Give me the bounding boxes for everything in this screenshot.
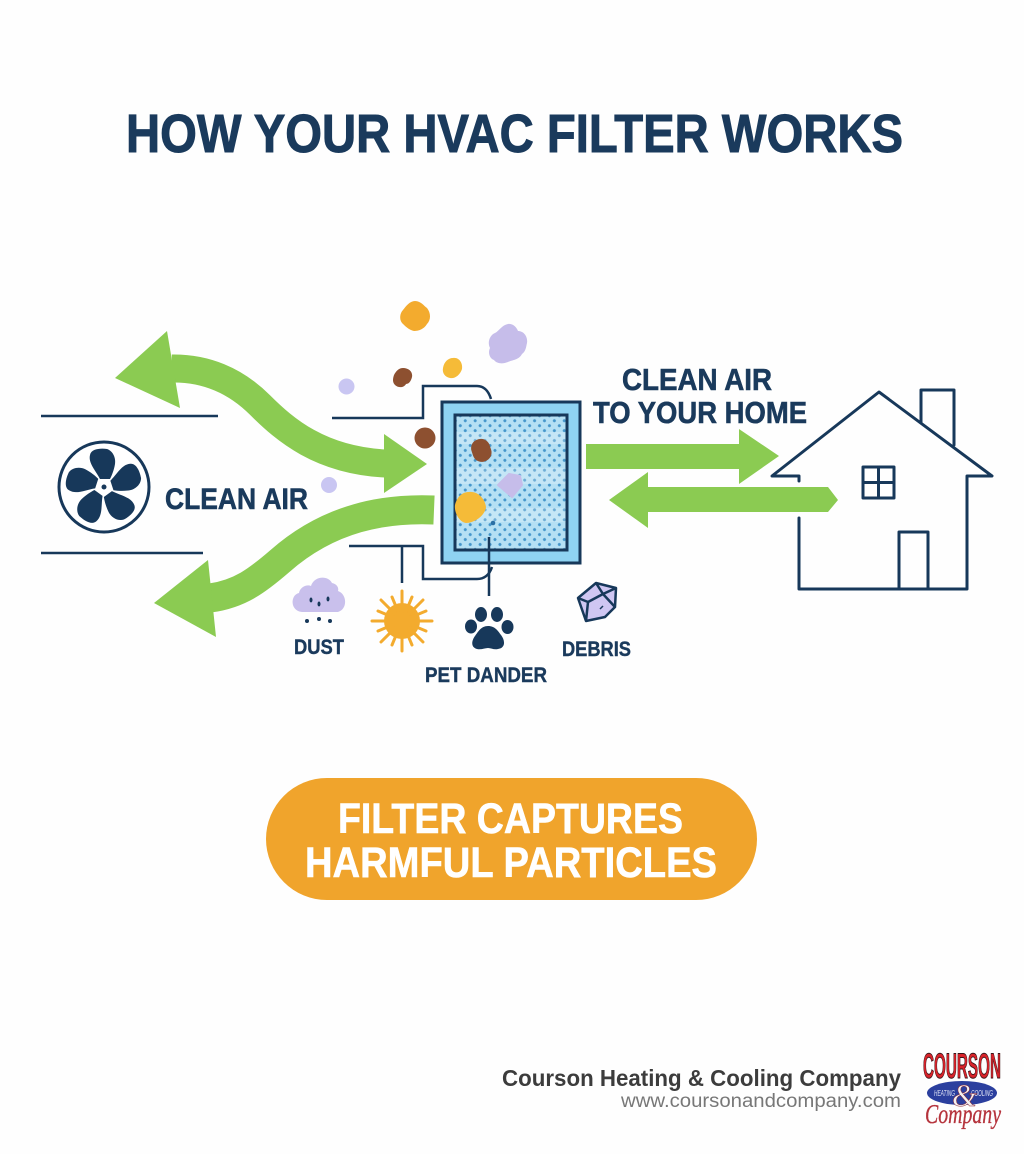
logo: &	[952, 1077, 977, 1113]
logo: HEATING	[934, 1089, 955, 1098]
footer: company name and website: www.coursonandcompany.com	[620, 1091, 901, 1112]
callout: filter captures harmful particles	[266, 778, 757, 900]
footer: company name and website: Courson Heating & Cooling Company	[502, 1065, 901, 1091]
arrow: right to home	[586, 429, 779, 484]
arrow: upper curved	[115, 331, 427, 493]
label: clean air: CLEAN AIR	[165, 483, 308, 516]
title: HOW YOUR HVAC FILTER WORKS	[126, 104, 903, 164]
logo	[923, 1047, 1001, 1129]
ducts around filter	[332, 386, 492, 583]
icon: debris gem	[578, 583, 616, 621]
footer: company name and website	[502, 1065, 901, 1112]
duct lines left	[41, 416, 218, 553]
icon: fan	[59, 442, 149, 532]
trapped particles	[455, 436, 522, 525]
arrow: left from home	[609, 472, 838, 528]
particles approaching	[321, 301, 527, 493]
icon: dust cloud	[293, 578, 345, 623]
filter	[442, 402, 580, 563]
arrow: lower curved	[154, 510, 434, 637]
diagram: airflow	[41, 301, 992, 687]
icon: paw	[465, 607, 514, 649]
icon: pollen sun	[372, 591, 432, 651]
label: clean air to your home: TO YOUR HOME	[593, 395, 807, 430]
label: clean air to your home	[593, 362, 807, 430]
callout: filter captures harmful particles: HARMFUL PARTICLES	[305, 839, 717, 887]
label: clean air to your home: CLEAN AIR	[622, 362, 772, 397]
logo: COOLING	[971, 1089, 993, 1098]
label: dust: DUST	[294, 636, 344, 659]
label: pet dander: PET DANDER	[425, 664, 547, 687]
callout: filter captures harmful particles: FILTER CAPTURES	[338, 795, 683, 843]
label: debris: DEBRIS	[562, 638, 631, 661]
icon: house	[772, 390, 992, 589]
